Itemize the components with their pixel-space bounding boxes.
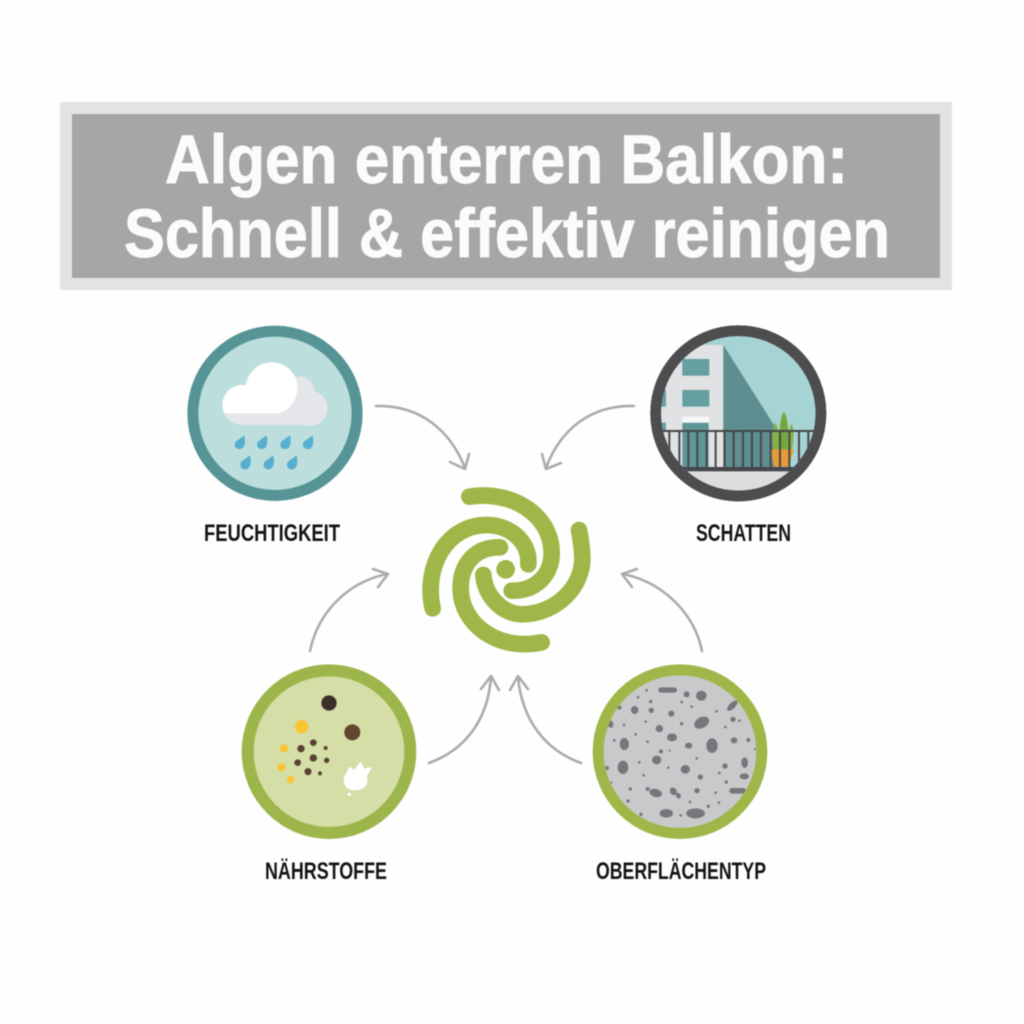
arrow: surface to algae (622, 569, 702, 651)
title banner: Schnell & effektiv reinigen (124, 195, 890, 272)
label: Oberflächentyp: OBERFLÄCHENTYP (596, 858, 766, 885)
title banner: Algen enterren Balkon: (165, 121, 848, 198)
icon: shaded balcony circle (650, 325, 826, 501)
icon: humidity circle (187, 326, 363, 501)
infographic canvas (60, 102, 952, 880)
label: Feuchtigkeit: FEUCHTIGKEIT (204, 520, 340, 547)
arrow: humidity to algae (376, 406, 469, 469)
icon: porous surface circle (593, 664, 767, 839)
arrow: shade to algae (542, 406, 634, 469)
icon: central algae swirl (431, 496, 582, 644)
icon: potted plant (770, 412, 794, 467)
arrow: nutrients to algae (310, 569, 388, 651)
label: Nährstoffe: NÄHRSTOFFE (265, 858, 387, 885)
arrow: nutrients to algae lower (429, 676, 499, 763)
label: Schatten: SCHATTEN (696, 520, 791, 547)
arrow: surface to algae lower (510, 676, 581, 763)
icon: nutrients circle (242, 664, 416, 839)
title banner (60, 102, 952, 290)
